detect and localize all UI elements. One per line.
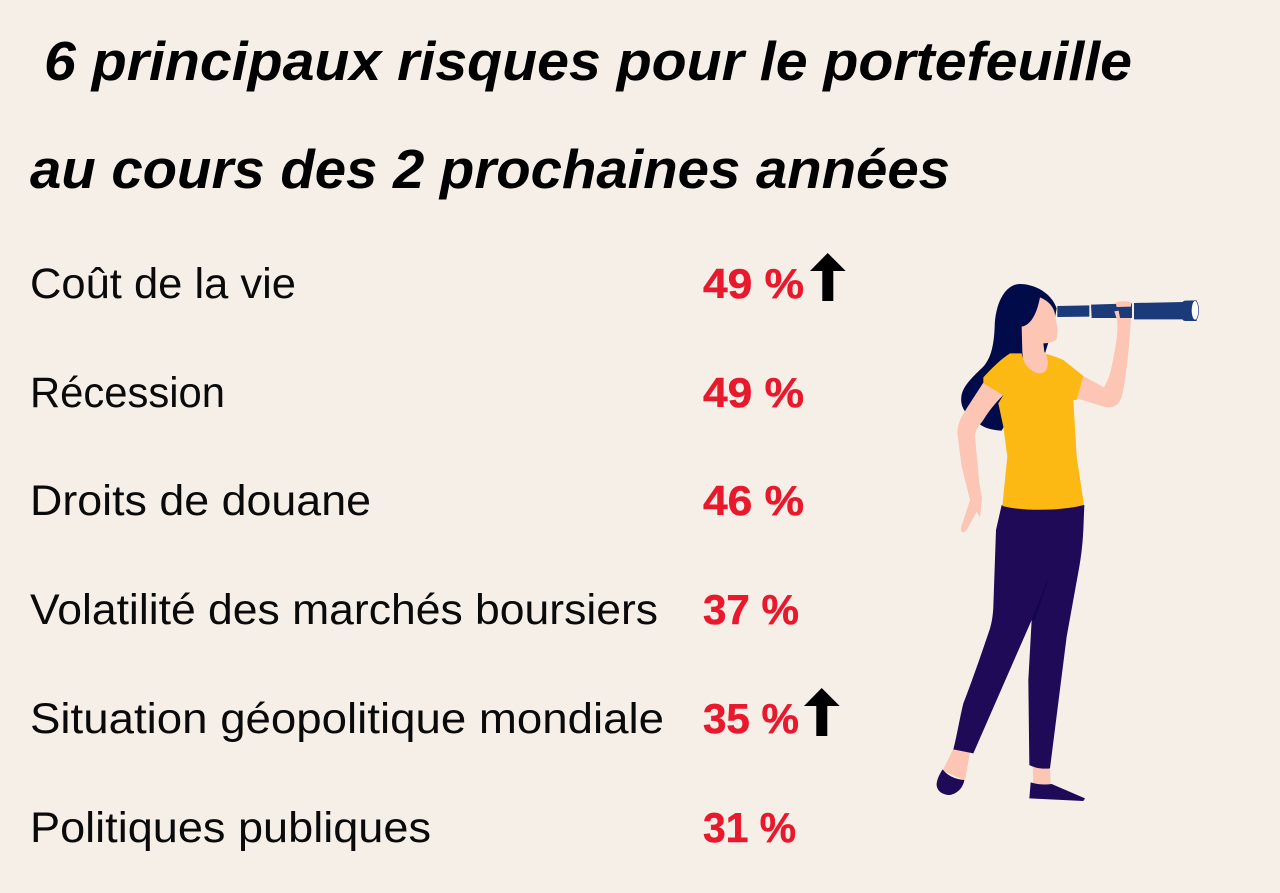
- row: Volatilité des marchés boursiers: 37 %: [703, 586, 799, 633]
- illustration: woman with telescope: [937, 284, 1199, 801]
- row: Situation géopolitique mondiale: [30, 688, 840, 743]
- row: Droits de douane: [30, 477, 804, 525]
- row: Volatilité des marchés boursiers: Volatilité des marchés boursiers: [30, 586, 658, 634]
- row: Récession: [30, 369, 804, 417]
- left arm and hand: [957, 383, 1003, 532]
- row: Politiques publiques: 31 %: [703, 804, 796, 851]
- hair: [961, 284, 1057, 431]
- risk list: [30, 253, 846, 852]
- row: Coût de la vie: Coût de la vie: [30, 260, 296, 308]
- face and neck: [1022, 297, 1058, 377]
- row: Coût de la vie: [30, 253, 846, 308]
- shirt: [983, 353, 1084, 510]
- row: Politiques publiques: [30, 804, 796, 852]
- title: [30, 30, 1132, 200]
- row: Récession: Récession: [30, 369, 225, 417]
- row: Récession: 49 %: [703, 369, 804, 416]
- row: Politiques publiques: Politiques publiques: [30, 804, 431, 852]
- icon: up arrow: [810, 253, 846, 301]
- telescope: [1057, 300, 1199, 321]
- row: Droits de douane: Droits de douane: [30, 477, 371, 525]
- row: Situation géopolitique mondiale: 35 %: [703, 695, 799, 742]
- title: 6 principaux risques pour le portefeuille: [44, 30, 1132, 92]
- legs and shoes: [937, 505, 1085, 801]
- icon: up arrow: [804, 688, 840, 736]
- fingers and thumb: [1114, 301, 1131, 319]
- right arm: [1077, 317, 1131, 407]
- upper body: [957, 284, 1199, 532]
- row: Coût de la vie: 49 %: [703, 260, 804, 307]
- row: Droits de douane: 46 %: [703, 477, 804, 524]
- title: au cours des 2 prochaines années: [30, 138, 950, 200]
- row: Situation géopolitique mondiale: Situation géopolitique mondiale: [30, 695, 664, 743]
